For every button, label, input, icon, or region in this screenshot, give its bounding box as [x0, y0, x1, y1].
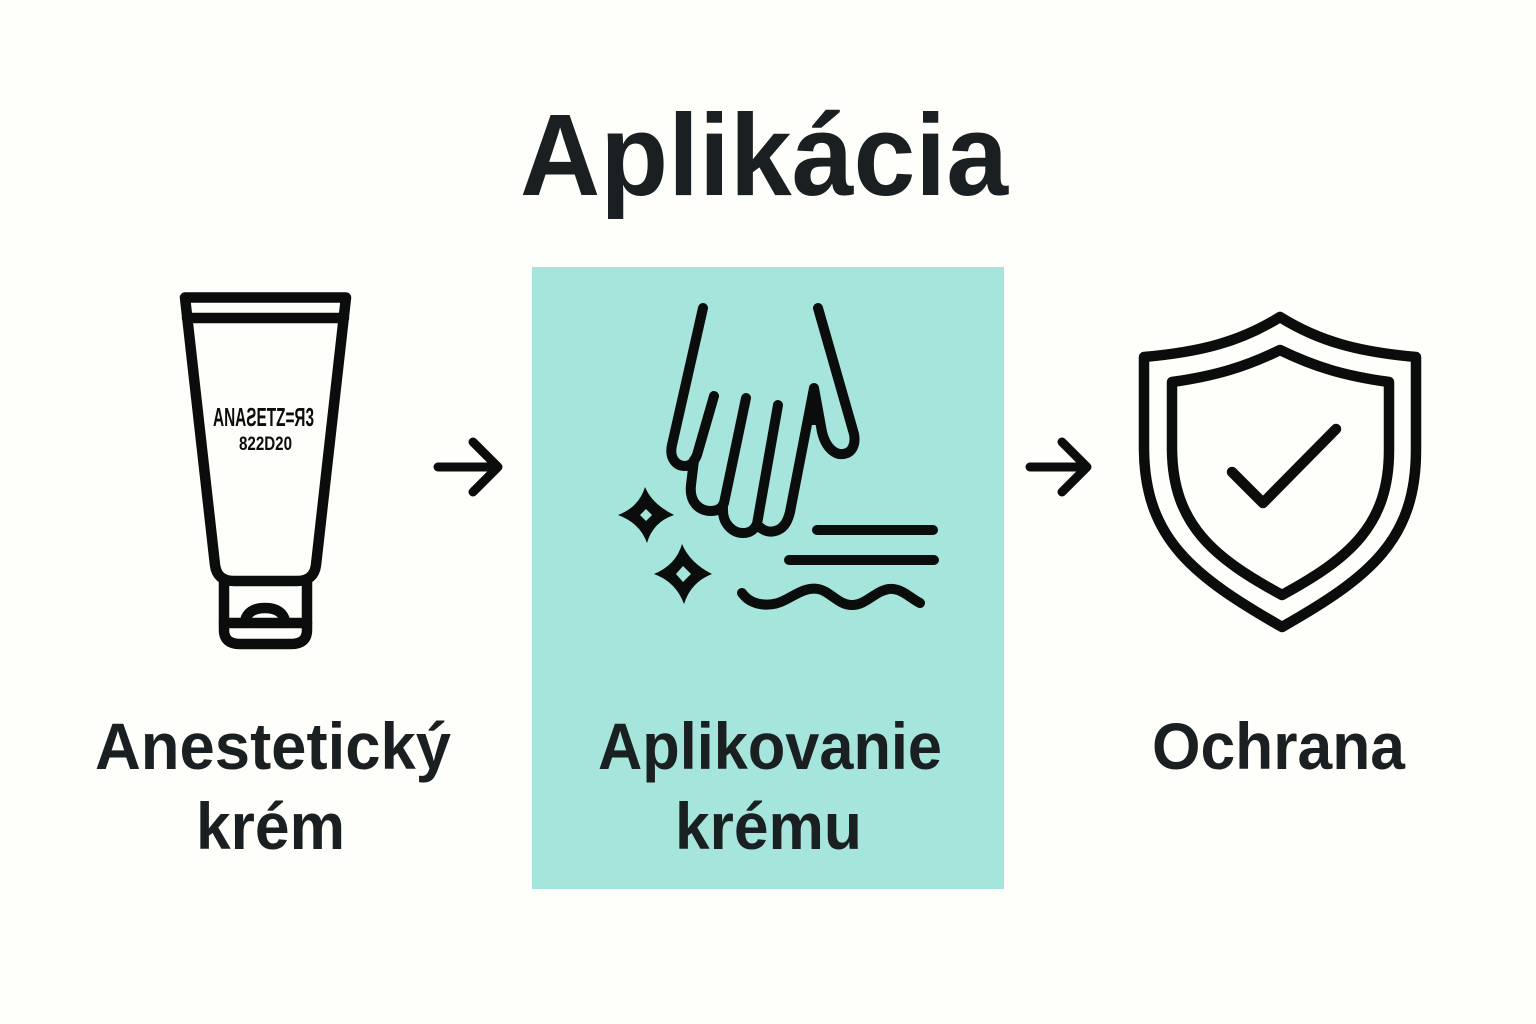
title: Aplikácia: [520, 90, 1009, 220]
shield inner: [1172, 350, 1389, 595]
label: step 1: Anestetický: [95, 709, 451, 783]
arrow: tube to application: [438, 442, 498, 492]
tube label: ANAƧETZ=Я3: [213, 402, 314, 432]
hand: [671, 308, 855, 533]
arrow: application to protection: [1030, 442, 1087, 492]
icon: shield with check: [1144, 317, 1416, 627]
sparkle: lower: [654, 544, 712, 604]
label: step 2: Aplikovanie: [598, 709, 942, 783]
panel: highlighted step: [532, 267, 1004, 889]
check mark: [1232, 429, 1336, 503]
label: step 1: [95, 709, 451, 863]
label: step 2: [598, 709, 942, 863]
label: step 1: krém: [196, 789, 345, 863]
shield outer: [1144, 317, 1416, 627]
skin wave: [742, 589, 920, 605]
icon: cream tube: [185, 298, 346, 644]
finger wedge: [804, 384, 824, 425]
label: step 2: krému: [675, 789, 862, 863]
sparkle: upper: [618, 487, 674, 543]
tube label: 822D20: [239, 434, 292, 455]
skin lines: [789, 530, 934, 560]
label: step 3: Ochrana: [1152, 709, 1406, 783]
tube label: [213, 402, 314, 455]
icon: hand applying cream: [618, 308, 934, 605]
